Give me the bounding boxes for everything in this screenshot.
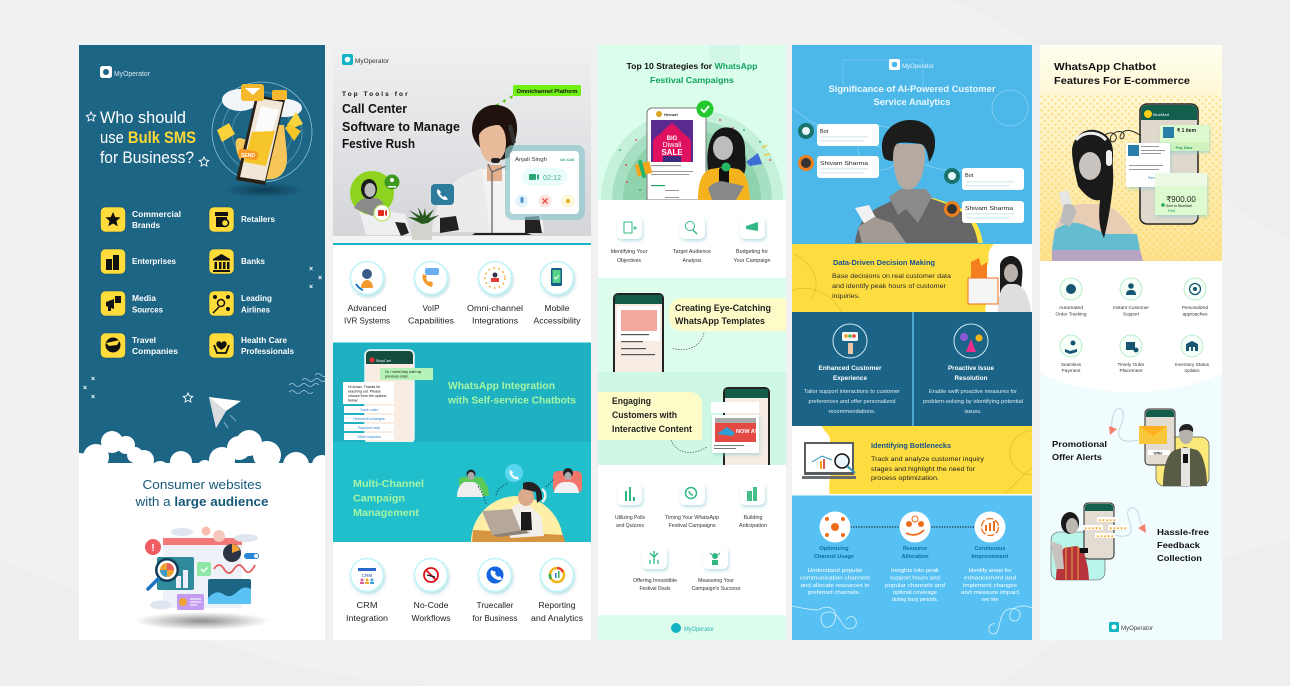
callout: creating eye-catching whatsapp templates [669,298,786,331]
heading: multi-channel campaign management: Management [353,507,420,519]
icon: outline stars [86,112,209,402]
feature: automated order tracking: Automated [1059,305,1084,310]
feature: seamless payment [1060,335,1082,373]
illustration: man with phone [855,120,983,243]
feature: omni-channel integrations: Integrations [472,316,518,326]
features white section with curve [1040,261,1222,392]
feature: timely order placement [1118,335,1145,373]
decorative crosses [83,266,322,401]
benefit: resource allocation: popular channels and [885,583,945,589]
feature: CRM integration: CRM [356,601,378,610]
feature icons [1056,278,1210,373]
heading: multi-channel campaign management: Multi-Channel [353,478,424,490]
strategy: building anticipation: Anticipation [739,523,767,529]
audience: leading airlines: Airlines [241,306,271,314]
feature: omni-channel integrations [467,262,523,326]
feature: no-code workflows: Workflows [412,614,450,623]
title: top 10 strategies: Top 10 Strategies for WhatsApp [626,61,758,71]
benefit: continuous improvement: Identify areas for [968,568,1012,574]
feature: mobile accessibility [534,262,580,326]
illustration: agent at laptop with contacts [457,464,582,542]
icon: phone bubble [431,184,454,205]
phone mockup with chatbot: Returns/Exchanges [353,417,385,421]
bubble: Shivam Sharma left [798,155,879,178]
section: interactive content [598,372,786,465]
feature: hassle-free feedback collection: Collection [1157,553,1202,563]
bubble: Shivam Sharma left: Shivam Sharma [820,161,869,167]
audience: travel companies: Travel [132,336,156,345]
feature: no-code workflows: No-Code [414,601,449,610]
icon: paper plane [209,397,241,428]
audience: leading airlines [209,291,272,316]
phone mockup with chatbot: choose from the options [348,394,387,398]
callout: omnichannel platform [495,85,581,107]
logo: MyOperator teal [342,54,390,65]
illustration: phone with order cards: Review and Pay [1148,176,1176,180]
feature: mobile accessibility: Mobile [544,304,570,313]
title: whatsapp chatbot features [1054,61,1190,87]
feature: CRM integration: Integration [346,614,388,623]
strategy: timing whatsapp festival campaigns: Timing Your WhatsApp [665,515,719,521]
desk, plant and laptop [333,206,591,244]
feature: automated order tracking: Order Tracking [1056,312,1087,316]
decorative crosses: × [309,284,313,291]
illustration: Diwali sale phone and woman: SALE [661,148,683,157]
strategy: irresistible festival deals [633,547,677,592]
feature: hassle-free feedback collection: ★★★★★ [1109,526,1127,530]
benefit: optimizing channel usage: Channel Usage [814,554,854,560]
strategy: polls and quizzes: and Quizzes [616,523,644,529]
feature: CRM integration: CRM [362,573,372,578]
avatar: caller in green circle [350,171,400,221]
strategy: budgeting for your campaign: Budgeting for [736,249,768,255]
feature: seamless payment: Seamless [1061,362,1082,367]
strategy: budgeting for your campaign [734,217,770,264]
benefit: optimizing channel usage [800,512,870,596]
callout: omnichannel platform: Omnichannel Platform [516,89,578,95]
panel: who should use bulk SMS [71,45,332,640]
title: who should use bulk SMS for business: Who should [100,108,186,127]
callout: engaging customers: Engaging [612,396,651,406]
feature: truecaller for business: for Business [472,614,518,623]
benefit: continuous improvement: enhancement and [964,576,1016,582]
heading and body text [832,258,951,300]
audience: media sources: Media [132,294,157,303]
feature: truecaller for business: Truecaller [476,601,514,610]
title: who should use bulk SMS for business: use Bulk SMS [100,128,196,147]
bubble: Bot left [798,123,879,146]
title: top tools for call center software: Software to Manage [342,120,460,134]
feature: VoIP capabilities [408,262,454,326]
panel: WhatsApp chatbot e-commerce [1040,45,1222,640]
heading and body text: Base decisions on real customer data [832,273,951,280]
benefit: resource allocation [885,512,945,603]
feature: advanced IVR systems: IVR Systems [344,316,390,326]
title: whatsapp chatbot features: Features For E-commerce [1054,75,1190,87]
benefit: continuous improvement: and measure impact [961,590,1020,596]
callout: creating eye-catching whatsapp templates: Creating Eye-Catching [675,303,771,313]
benefit: continuous improvement: Continuous [974,546,1006,552]
feature: timely order placement: Timely Order [1118,362,1145,367]
logo: MyOperator light [889,59,935,70]
strategy: measuring campaign success [692,547,741,592]
illustration: phone with order cards: Paid [1168,209,1175,213]
strategy: irresistible festival deals: Festival Deals [640,586,671,592]
illustration: woman with headphones [1052,130,1143,261]
text: consumer websites with a large audience [134,478,269,509]
logo: MyOperator white [100,66,151,78]
card: proactive issue resolution: issues. [964,409,982,415]
strategy: identifying your objectives: Objectives [617,258,641,264]
feature: hassle-free feedback collection: ★★★★★ [1084,526,1102,530]
callout: creating eye-catching whatsapp templates: WhatsApp Templates [675,316,765,326]
audience: enterprises: Enterprises [132,257,177,266]
decorative crosses: × [309,266,313,273]
heading: whatsapp integration: WhatsApp Integration [448,380,555,392]
phone mockup with chatbot: Hi, I need help with my [385,370,422,374]
audience: health care professionals: Professionals [241,347,295,356]
feature: reporting and analytics: and Analytics [531,614,583,623]
illustration: Diwali sale phone and woman: Diwali [663,142,682,149]
title: top tools for call center software: Festive Rush [342,137,415,151]
card: enhanced customer experience: Enhanced Customer [818,365,882,372]
feature: personalized approaches: approaches [1182,312,1208,316]
section: eye-catching templates [598,278,786,372]
card: proactive issue resolution: problem-solving by identifying potential [923,399,1023,405]
section: identifying bottlenecks [792,426,1032,495]
heading: multi-channel campaign management: Campaign [353,492,405,504]
strategy: target audience analysis: Analysis [682,258,702,264]
audience: commercial brands [100,207,181,232]
card: proactive issue resolution: Enable swift proactive measures for [929,389,1017,395]
panel: AI customer service analytics [792,45,1032,640]
feature: hassle-free feedback collection: ★★★★★ [1098,518,1116,522]
feature: VoIP capabilities: Capabilities [408,316,454,326]
phone mockup with chatbot: reaching out. Please [348,390,381,394]
benefit: optimizing channel usage: communication channels [800,576,870,582]
benefit: resource allocation: during busy periods. [892,597,938,603]
card: enhanced customer experience: Experience [833,375,867,382]
connector: dotted line [835,526,990,528]
illustration: phone with order cards: ₹ 1 item [1177,128,1197,134]
phone mockup with chatbot: Track order [360,408,379,412]
phone mockup with chatbot: previous order. [385,374,409,378]
illustration: monitor with magnifier [802,442,856,479]
illustration: woman with laptop [968,256,1031,312]
footer: MyOperator logo mint [598,615,786,640]
section: dark two-column cards [792,312,1032,426]
benefit: resource allocation: Insights into peak [891,568,939,574]
heading and body text: and identify peak hours of customer [832,283,947,290]
feature: personalized approaches: Personalized [1182,305,1208,310]
audience: leading airlines: Leading [241,294,272,303]
benefit: resource allocation: Resource [903,546,927,552]
title: top 10 strategies: Festival Campaigns [650,75,734,85]
feature: promotional offer alerts: Promotional [1052,439,1107,449]
strategy: target audience analysis [673,217,711,264]
strategy: irresistible festival deals: Offering Irresistible [633,578,677,584]
title: top 10 strategies [626,61,758,85]
illustration: phone in hand with envelopes: SEND [241,153,255,159]
card: enhanced customer experience: Tailor support interactions to customer [804,389,900,395]
illustration: phone with order cards: Pay Now [1176,145,1193,150]
hero background with dots [1040,45,1222,261]
feature: reporting and analytics [531,558,583,623]
card: enhanced customer experience: recommendations. [828,409,876,415]
audience: retailers: Retailers [241,215,276,224]
feature: reporting and analytics: Reporting [538,601,576,610]
phone mockup with chatbot: Payment help [358,426,380,430]
benefit: resource allocation: support hours and [890,576,940,582]
heading and body text: inquiries. [832,293,860,300]
illustration: analytics dashboard: ! [151,543,155,554]
card: enhanced customer experience [804,324,900,415]
logo: MyOperator teal: MyOperator [355,58,390,65]
section: multi-channel campaign [333,442,591,542]
footer: MyOperator logo teal [1109,622,1154,632]
title: who should use bulk SMS for business: for Business? [100,148,194,167]
decorative crosses: × [91,394,95,401]
decorative crosses: × [91,376,95,383]
feature: hassle-free feedback collection: ★★★★★ [1096,534,1114,538]
strategy: building anticipation: Building [744,515,762,521]
feature: promotional offer alerts: Offer Alerts [1052,452,1102,462]
strategy: measuring campaign success: Measuring Your [698,578,734,584]
phone: interactive offer: NOW AT [736,429,758,435]
heading and body text: Track and analyze customer inquiry [871,456,985,463]
card: enhanced customer experience: preferences and offer personalized [808,399,896,405]
feature: mobile accessibility: Accessibility [534,316,580,326]
title: top tools for call center software [342,91,460,151]
title: top tools for call center software: Top Tools for [342,91,410,98]
panel: call center tools [333,45,591,640]
heading and body text [871,441,985,482]
card: active call with Anjali Singh: 02:12 [543,175,561,182]
audience: travel companies [100,333,179,358]
heading: whatsapp integration: with Self-service Chatbots [447,394,576,406]
feature: instant customer support: Instant Customer [1113,305,1150,310]
card: active call with Anjali Singh [505,145,585,220]
audience: retailers [209,207,276,232]
benefit: optimizing channel usage: Understand popular [808,568,863,574]
bubble: Bot right: Bot [965,173,974,179]
benefit: optimizing channel usage: and allocate resources to [800,583,870,589]
feature: inventory status updates: Inventory Status [1175,362,1210,367]
feature: promotional offer alerts [1052,409,1209,486]
audience: media sources [100,291,164,316]
section: benefits on blue [792,494,1032,640]
heading and body text: Identifying Bottlenecks [871,441,951,450]
illustration: Diwali sale phone and woman: BIG [667,136,678,142]
title: top tools for call center software: Call Center [342,102,407,116]
feature: hassle-free feedback collection [1050,503,1209,580]
audience icon grid [100,207,295,358]
strategy: identifying your objectives [610,217,648,264]
audience: enterprises [100,249,177,274]
benefit: optimizing channel usage: preferred channels . [808,590,863,596]
illustration: Diwali sale phone and woman [601,100,783,200]
section: WhatsApp integration [333,344,591,443]
feature: instant customer support [1113,278,1150,316]
heading and body text: process optimization. [871,475,939,482]
white feature row 2 [333,542,591,640]
illustration: agent with headset [432,105,544,234]
illustration: analytics dashboard [134,526,270,630]
phone mockup with chatbot [343,350,433,443]
decorative crosses: × [83,385,87,392]
benefit: continuous improvement [961,512,1020,603]
callout: engaging customers: Customers with [612,410,677,420]
feature: hassle-free feedback collection: Feedback [1157,540,1200,550]
white feature row 1 [333,243,591,344]
feature: omni-channel integrations: Omni-channel [467,304,523,313]
text: consumer websites with a large audience: Consumer websites [142,478,262,492]
illustration: phone with order cards: ₹900.00 [1166,195,1196,204]
audience: health care professionals [209,333,295,358]
heading: whatsapp integration [448,382,576,404]
strategy: building anticipation [739,483,767,529]
phone mockup with chatbot: Hi Aman, Thanks for [348,385,381,389]
phone: template mockup [613,293,664,372]
audience: health care professionals: Health Care [241,336,288,345]
strategy: polls and quizzes: Utilizing Polls [615,515,645,521]
feature: VoIP capabilities: VoIP [422,304,440,313]
phone: interactive offer [711,387,770,465]
logo: MyOperator light: MyOperator [902,63,935,70]
feature: inventory status updates: Updates [1184,368,1200,373]
heading and body text: stages and highlight the need for [871,466,976,473]
bubble: Shivam Sharma right: Shivam Sharma [965,206,1014,212]
panel: WhatsApp festival strategies [598,45,786,640]
feature: CRM integration [346,558,388,623]
cloud divider and white section [71,430,332,640]
heading: multi-channel campaign management [353,478,424,519]
feature: inventory status updates [1175,335,1210,373]
footer: MyOperator logo teal: MyOperator [1121,625,1154,632]
phone mockup with chatbot: ShopCart [376,359,391,363]
benefit: continuous improvement: Improvement [972,554,1009,560]
benefit: optimizing channel usage: Optimizing [820,546,848,552]
strategy: budgeting for your campaign: Your Campaign [734,258,770,264]
benefit: resource allocation: Allocation [902,554,929,560]
audience: commercial brands: Brands [132,221,161,230]
feature: timely order placement: Placement [1120,368,1143,373]
strategy: polls and quizzes [615,483,645,529]
feature: seamless payment: Payment [1062,368,1081,373]
card: proactive issue resolution: Proactive Issue [948,365,994,372]
bubble: Shivam Sharma right [944,201,1024,223]
illustration: Diwali sale phone and woman: Hemart [664,112,678,117]
decorative crosses: × [318,275,322,282]
card: active call with Anjali Singh: Anjali Singh [515,157,547,163]
bubble: Bot right [944,168,1024,190]
callout: engaging customers [598,392,702,440]
benefit: continuous improvement: over time [982,597,998,603]
audience: media sources: Sources [132,306,164,314]
phone mockup with chatbot: Other inquiries [357,435,381,439]
feature: truecaller for business [472,558,518,623]
card: proactive issue resolution [923,324,1023,415]
decorative waves [289,374,327,394]
strategy: timing whatsapp festival campaigns: Festival Campaigns [668,523,716,529]
audience: commercial brands: Commercial [132,210,181,219]
feature: personalized approaches [1182,278,1208,316]
strategy: target audience analysis: Target Audience [673,249,711,255]
phone mockup with chatbot: below: [348,398,358,402]
strategy: measuring campaign success: Campaign's Success [692,586,741,592]
section: data-driven decision making [792,244,1032,312]
chat cards [798,123,1024,223]
title: significance of AI-powered: Significance of AI-Powered Customer [828,84,996,95]
feature: promotional offer alerts: Offer [1153,452,1163,456]
benefit: resource allocation: optimal coverage [893,590,937,596]
heading and body text: Data-Driven Decision Making [833,258,935,267]
benefit: continuous improvement: implement changes [963,583,1017,589]
strategy: timing whatsapp festival campaigns [665,483,719,529]
footer: MyOperator logo mint: MyOperator [684,626,715,633]
bubble: Bot left: Bot [820,129,829,135]
illustration: phone in hand with envelopes [212,82,312,198]
title: significance of AI-powered [828,84,996,108]
title: whatsapp chatbot features: WhatsApp Chatbot [1054,61,1157,73]
title: significance of AI-powered: Service Analytics [874,97,950,108]
card: active call with Anjali Singh: On Call [560,157,574,162]
feature: advanced IVR systems [344,262,390,326]
card: proactive issue resolution: Resolution [954,375,988,382]
text: consumer websites with a large audience: with a large audience [134,495,269,509]
feature: hassle-free feedback collection: Hassle-free [1157,527,1209,537]
logo: MyOperator white: MyOperator [114,71,151,78]
callout: engaging customers: Interactive Content [612,424,692,434]
feature: automated order tracking [1056,278,1087,316]
audience: travel companies: Companies [132,347,179,356]
strategies row [598,465,786,615]
feature: instant customer support: Support [1123,312,1140,316]
audience: banks: Banks [241,257,266,266]
illustration: phone with order cards [1104,104,1209,224]
illustration: phone with order cards: BlueMart [1153,112,1170,117]
audience: banks [209,249,266,274]
strategy: identifying your objectives: Identifying Your [610,249,648,255]
title: who should use bulk SMS for business [100,111,196,163]
feature: no-code workflows [412,558,450,623]
feature: advanced IVR systems: Advanced [348,304,386,313]
illustration: phone with order cards: Sent to BlueMart [1166,204,1192,208]
